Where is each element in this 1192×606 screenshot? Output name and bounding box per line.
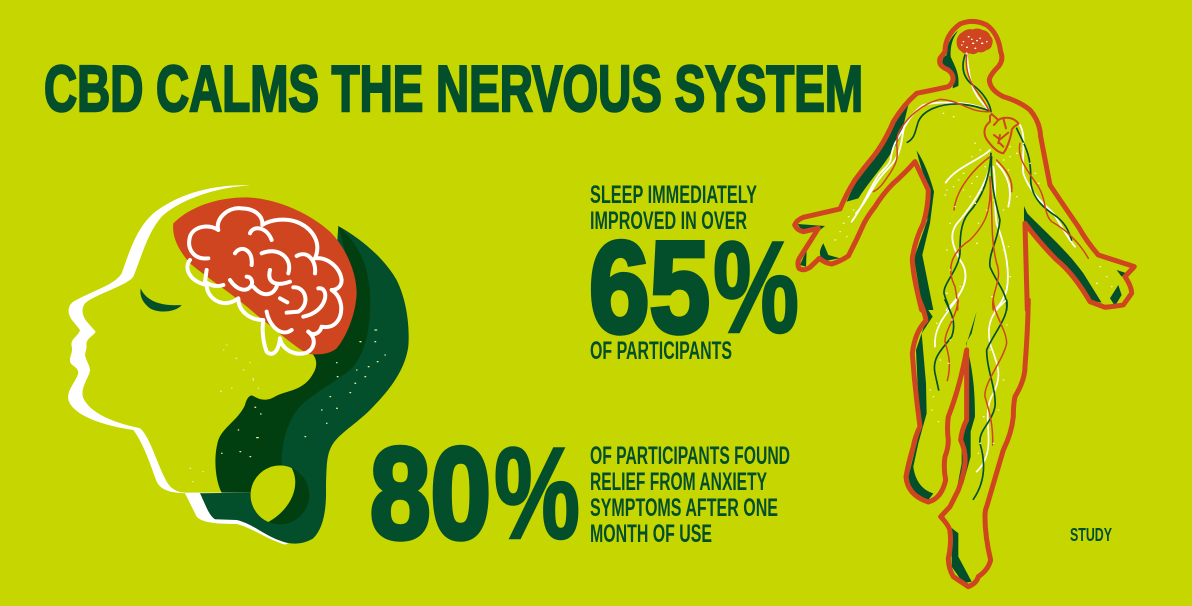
speckles: [835, 113, 1112, 297]
body shadows: [797, 31, 1127, 310]
stat: anxiety relief 80%: [370, 420, 790, 566]
nerves: orange: [873, 55, 1088, 310]
head: lime face cut-out: [83, 185, 350, 493]
stat: anxiety relief 80%: SYMPTOMS AFTER ONE: [590, 494, 778, 522]
body: upper part: [795, 21, 1134, 310]
title: CBD CALMS THE NERVOUS SYSTEM: [44, 52, 863, 125]
stat: sleep improved 65%: 65: [589, 214, 710, 360]
stat: anxiety relief 80%: %: [494, 420, 580, 566]
head: back shadow shape: [200, 226, 409, 544]
brain: [957, 28, 993, 54]
speckles: [190, 330, 385, 482]
illustration: human body nervous system: [795, 21, 1134, 587]
stat: sleep improved 65%: IMPROVED IN OVER: [590, 207, 747, 235]
stat: anxiety relief 80%: OF PARTICIPANTS FOUND: [590, 442, 790, 470]
nerves: white: [852, 53, 1075, 310]
leg nerves: [935, 300, 1007, 472]
stat: anxiety relief 80%: 80: [370, 420, 491, 566]
source label: STUDY: [1070, 525, 1112, 545]
stat: anxiety relief 80%: MONTH OF USE: [590, 520, 712, 548]
stat: sleep improved 65%: OF PARTICIPANTS: [590, 337, 732, 365]
nerves: green: [907, 55, 1072, 310]
neck ring: [251, 466, 309, 524]
leg outline: [906, 300, 1028, 587]
body outline: [795, 21, 1134, 310]
head: white offset profile: [68, 185, 303, 545]
leg shadows: [908, 300, 977, 583]
stat: anxiety relief 80%: RELIEF FROM ANXIETY: [590, 468, 767, 496]
illustration: head with brain: [68, 185, 409, 545]
heart: [984, 114, 1018, 153]
stat: sleep improved 65%: %: [713, 214, 799, 360]
stat: sleep improved 65%: SLEEP IMMEDIATELY: [590, 181, 757, 209]
stat: sleep improved 65%: [589, 181, 799, 365]
body: lower part: [906, 300, 1028, 587]
brain: orange mass: [173, 197, 357, 354]
head: dark inner shadow: [215, 226, 370, 493]
closed eye: [140, 288, 182, 312]
brain: white outline: [187, 208, 342, 354]
